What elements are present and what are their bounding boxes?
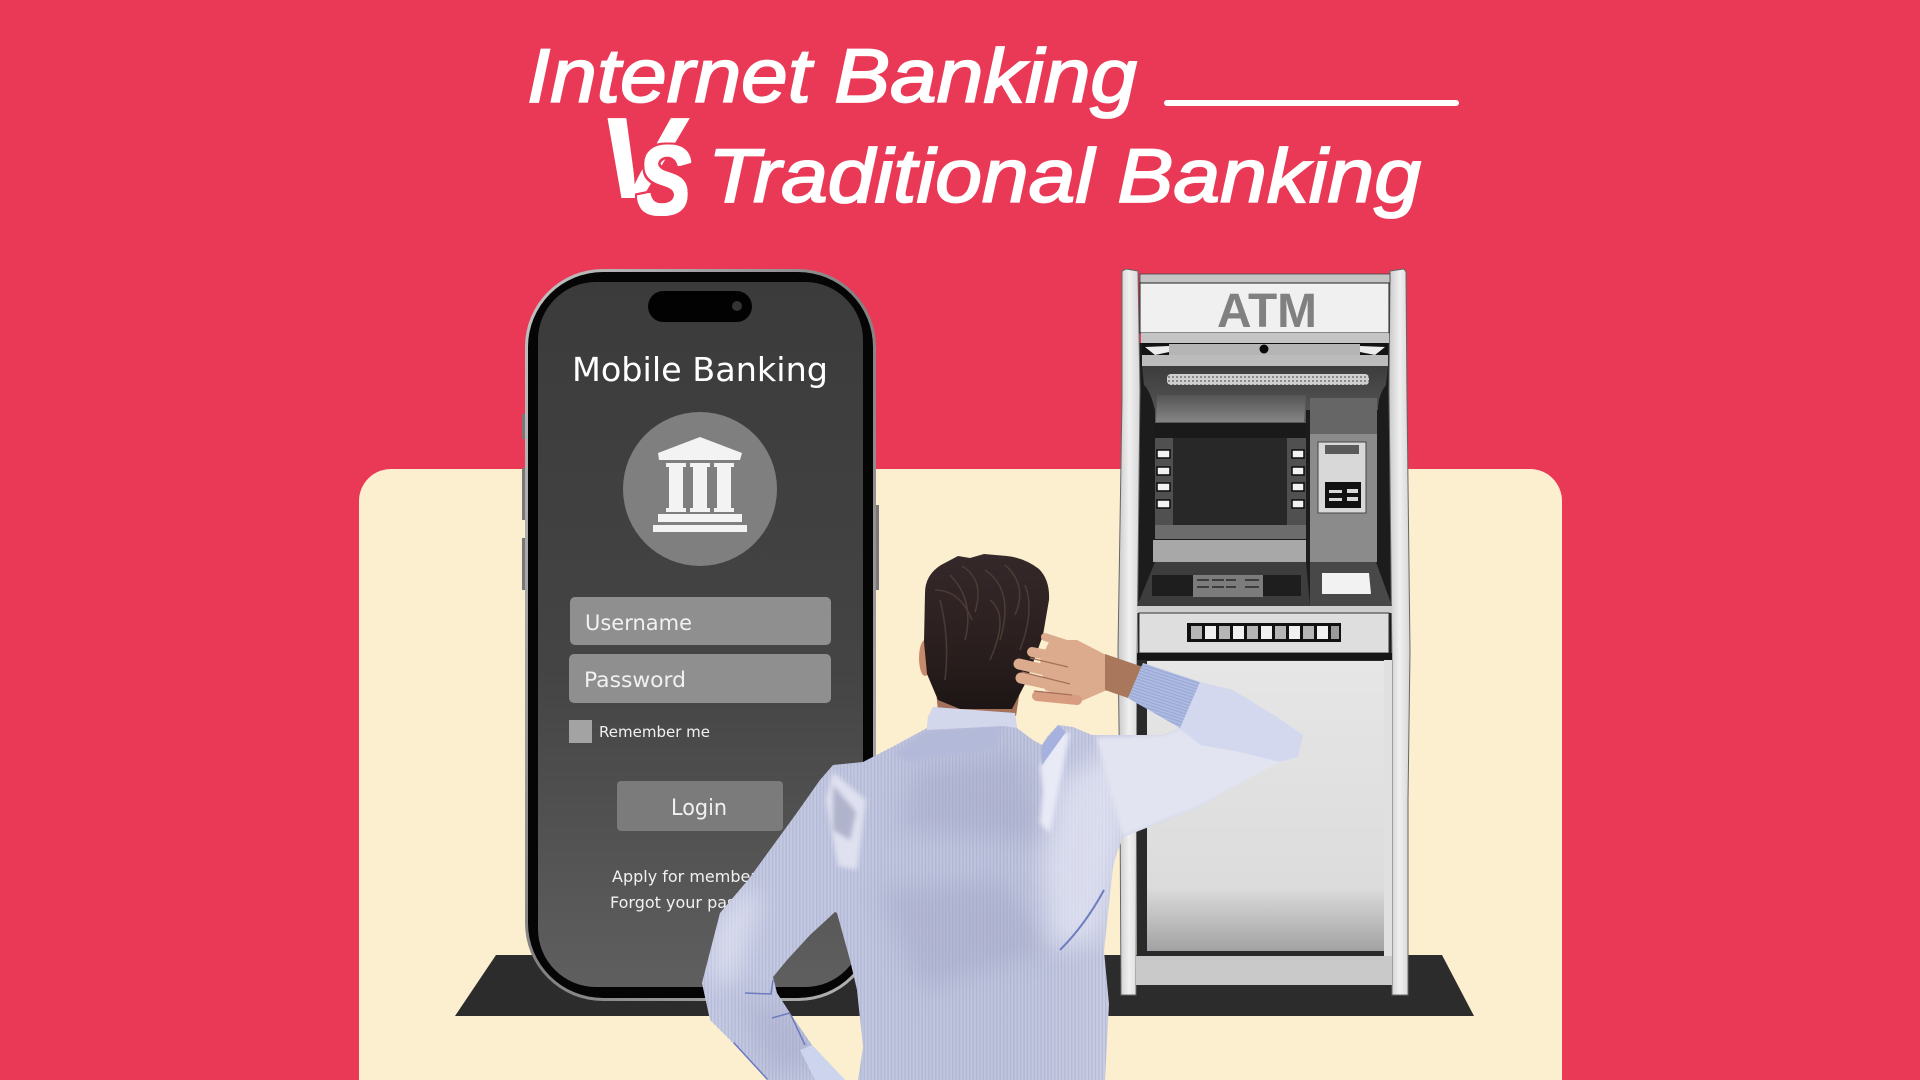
atm slot panel — [1137, 606, 1392, 660]
atm sign — [1140, 283, 1389, 338]
dynamic island — [648, 291, 752, 322]
vs badge: V — [597, 93, 690, 223]
cuff — [1128, 663, 1200, 728]
hair highlights — [935, 565, 1029, 680]
slot row — [1187, 623, 1341, 642]
atm keypad — [1193, 575, 1263, 597]
wrist — [1105, 654, 1143, 698]
atm right pillar — [1389, 269, 1410, 995]
atm right keys — [1292, 450, 1304, 508]
screen heading: Mobile Banking — [572, 350, 828, 389]
camera — [732, 301, 742, 311]
atm lower door — [1136, 660, 1392, 985]
right crease — [1060, 890, 1104, 950]
fingers — [1019, 637, 1085, 700]
left shoulder shadow — [833, 785, 856, 840]
card reader — [1325, 482, 1361, 508]
icon building — [653, 437, 747, 532]
bank icon — [623, 412, 777, 566]
title line 2: Traditional Banking — [708, 134, 1421, 219]
username field: Username — [585, 611, 692, 635]
screen links — [610, 867, 790, 912]
hair — [924, 554, 1049, 709]
password field: Password — [584, 668, 686, 692]
atm base — [1136, 956, 1392, 985]
upper arm sleeve — [1096, 728, 1290, 837]
palm — [1040, 640, 1143, 703]
password field — [569, 654, 831, 703]
shirt shadow folds — [750, 760, 1037, 1071]
title — [527, 34, 1459, 235]
atm sign: ATM — [1217, 285, 1317, 338]
phone — [522, 269, 879, 1001]
atm screen housing — [1153, 395, 1306, 562]
lower sleeve cuff edge — [733, 980, 805, 1080]
atm screen — [1173, 438, 1287, 525]
atm left pillar — [1118, 269, 1140, 995]
login button — [617, 781, 783, 831]
phone body — [525, 269, 876, 1001]
collar — [927, 707, 1017, 730]
hand — [1019, 637, 1143, 703]
login button: Login — [671, 796, 727, 821]
atm machine — [1118, 269, 1410, 995]
title underline — [1164, 100, 1459, 106]
username field — [570, 597, 831, 645]
phone side buttons — [522, 414, 879, 590]
remember me checkbox: Remember me — [599, 723, 710, 741]
finger creases — [1022, 658, 1072, 695]
atm hood — [1142, 366, 1388, 423]
back pleat light — [1040, 732, 1070, 833]
atm speaker grille — [1167, 374, 1369, 385]
phone bezel — [528, 272, 873, 998]
shirt details clipped — [690, 663, 1303, 1080]
receipt slot panel — [1318, 442, 1366, 513]
remember me checkbox — [569, 720, 710, 743]
screen links: Forgot your password — [610, 893, 783, 912]
left shoulder patch — [826, 772, 866, 870]
lower cuff — [800, 1045, 845, 1080]
screen links: Apply for membership — [612, 867, 790, 886]
atm keypad shelf — [1137, 562, 1392, 606]
atm right panel — [1310, 398, 1377, 562]
neck — [936, 690, 1020, 716]
shirt base — [702, 663, 1303, 1080]
back pleat blue — [1042, 725, 1066, 765]
atm left keys — [1157, 450, 1170, 508]
icon circle — [623, 412, 777, 566]
shirt stripes — [690, 700, 1130, 1080]
ear — [919, 640, 931, 676]
shirt — [690, 663, 1303, 1080]
forearm sleeve — [1186, 732, 1288, 762]
man from behind — [690, 554, 1303, 1080]
dark floor platform — [455, 955, 1474, 1016]
title line 1: Internet Banking — [527, 34, 1137, 119]
atm white plate — [1322, 573, 1371, 594]
phone screen — [538, 282, 863, 987]
atm camera bar — [1141, 333, 1389, 366]
yoke — [896, 726, 1000, 760]
atm top band — [1140, 274, 1390, 283]
cream panel — [359, 469, 1562, 1080]
atm dark interior — [1138, 343, 1392, 665]
shirt light folds — [712, 740, 1130, 985]
vs badge: S — [637, 125, 691, 235]
